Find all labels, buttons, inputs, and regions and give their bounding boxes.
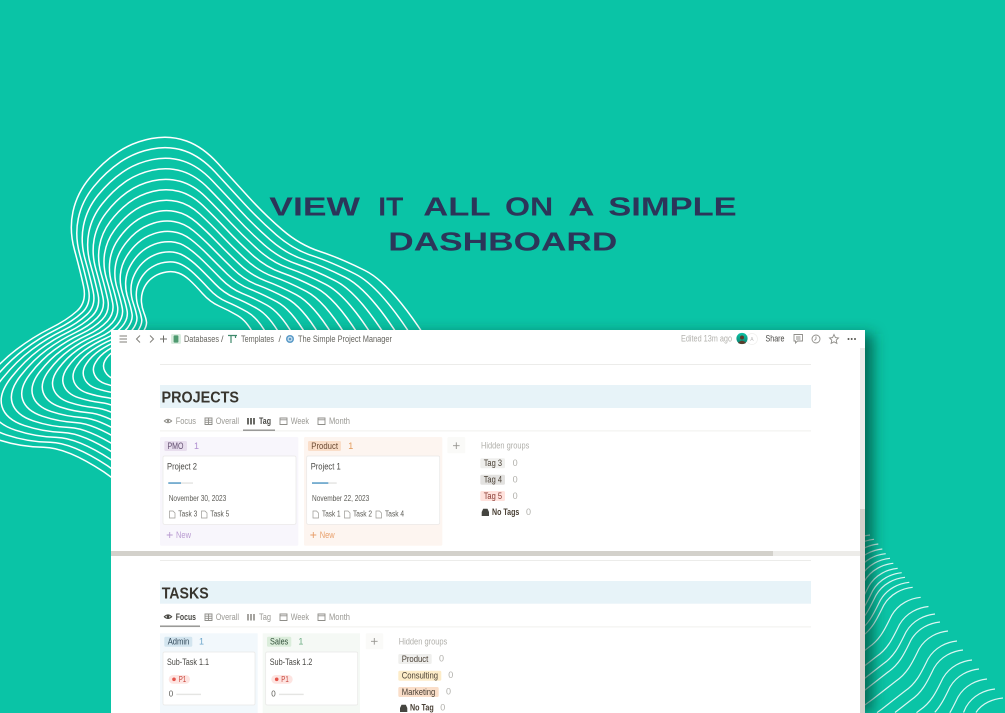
icon: back and forward arrows (136, 336, 154, 342)
card: Sub-Task 1.1: Sub-Task 1.1 (167, 657, 209, 667)
tabs: tasks: Month (329, 612, 350, 622)
hidden groups: tasks: Product (402, 654, 429, 664)
column: Admin: 1 (199, 637, 204, 647)
divider (160, 626, 811, 628)
breadcrumb: page name: The Simple Project Manager (298, 334, 392, 344)
avatar (736, 333, 748, 344)
hidden groups: tasks: 0 (448, 670, 453, 680)
hidden groups: tasks: 0 (446, 686, 451, 696)
card: Project 1: November 22, 2023 (312, 494, 370, 503)
icon: target (286, 335, 294, 343)
hidden groups: tasks: 0 (440, 702, 445, 712)
banner: projects heading (160, 385, 811, 408)
column: Admin (160, 633, 258, 713)
decorative contour waves: left blob (0, 137, 424, 490)
hidden groups: projects (480, 440, 531, 517)
title second line: DASHBOARD (388, 227, 617, 257)
tabs: tasks: Week (291, 612, 309, 622)
icon: templates crane (228, 336, 237, 343)
tabs: tasks: Focus (176, 612, 196, 622)
hidden groups: tasks: Consulting (402, 671, 438, 681)
icon: database (171, 334, 181, 344)
title: ON (505, 192, 553, 222)
card: Sub-Task 1.1: 0 (169, 690, 174, 699)
card: Project 1 (307, 456, 440, 524)
column: Sales: 1 (298, 637, 303, 647)
hidden groups: projects: 0 (513, 491, 518, 501)
hidden groups: projects: 0 (513, 458, 518, 468)
card: Project 1: Task 1 (322, 510, 341, 518)
card: Sub-Task 1.1: P1 (179, 675, 187, 684)
hidden groups: projects: 0 (513, 474, 518, 484)
card: Project 2: Task 3 (178, 510, 198, 518)
tabs: tasks: Tag (259, 612, 271, 622)
share: Share (766, 334, 784, 344)
banner: tasks heading: TASKS (162, 585, 209, 602)
hidden groups: projects: Tag 3 (484, 458, 502, 468)
card: Sub-Task 1.2: P1 (281, 675, 289, 684)
column: PMO: New (176, 530, 191, 540)
edited time: Edited 13m ago (681, 334, 732, 344)
tabs: tasks (160, 612, 350, 627)
column: PMO: PMO (168, 441, 184, 451)
card: Project 2: Project 2 (167, 461, 197, 471)
hidden groups: tasks: Hidden groups (399, 636, 448, 646)
card: Sub-Task 1.2: Sub-Task 1.2 (270, 657, 312, 667)
tabs: projects: Week (291, 416, 309, 426)
title: SIMPLE (608, 192, 737, 222)
hidden groups: projects: Tag 4 (484, 474, 502, 484)
divider (160, 430, 811, 432)
breadcrumb separator: / (221, 334, 224, 344)
icon: clock (812, 335, 820, 343)
panel shadow (130, 334, 873, 713)
tabs: projects: Tag (259, 416, 271, 426)
card: Project 2 (163, 456, 296, 524)
tabs: projects: Month (329, 416, 350, 426)
card: Project 2: November 30, 2023 (169, 494, 227, 503)
divider (160, 560, 811, 561)
card: Project 1: Task 2 (353, 510, 372, 518)
icon: comments (794, 334, 802, 343)
breadcrumb: Databases: Databases (184, 334, 219, 344)
second avatar (746, 334, 758, 344)
hidden groups: tasks: Marketing (402, 687, 435, 697)
hidden groups: projects: 0 (526, 507, 531, 517)
divider (160, 364, 811, 365)
icon: more dots (848, 338, 856, 340)
column: Sales: Sales (270, 637, 289, 647)
icon: menu (120, 336, 127, 342)
tabs: projects: Focus (176, 416, 196, 426)
breadcrumb separator: / (278, 334, 282, 344)
hidden groups: projects: Tag 5 (484, 491, 502, 501)
add group button (366, 633, 383, 649)
hidden groups: tasks: 0 (439, 654, 444, 664)
column: Admin: Admin (168, 637, 189, 647)
title: ALL (423, 192, 491, 222)
column: Product: Product (311, 441, 338, 451)
title: A (568, 192, 595, 222)
banner: tasks heading (160, 581, 811, 604)
column: PMO (160, 437, 298, 546)
tabs: projects (164, 416, 350, 431)
hidden groups: tasks: No Tag (410, 702, 434, 712)
tabs: tasks: Overall (216, 612, 239, 622)
card: Project 2: Task 5 (210, 510, 230, 518)
decorative contour waves: bottom right (735, 530, 1003, 713)
card: Sub-Task 1.1 (163, 652, 255, 705)
column: Product (304, 437, 442, 546)
vertical scrollbar (860, 348, 865, 713)
title: IT (378, 192, 403, 222)
banner: projects heading: PROJECTS (162, 389, 239, 406)
horizontal scrollbar (111, 551, 860, 556)
card: Project 1: Project 1 (311, 461, 341, 471)
column: Product: New (320, 530, 335, 540)
column: PMO: 1 (194, 441, 199, 451)
icon: star (830, 334, 838, 343)
icon: plus (160, 336, 167, 342)
hidden groups: projects: Hidden groups (481, 440, 530, 450)
tabs: projects: Overall (216, 416, 239, 426)
breadcrumb: Templates: Templates (241, 334, 274, 344)
hidden groups: tasks (398, 636, 453, 712)
column: Product: 1 (348, 441, 353, 451)
panel: dashboard screenshot (111, 330, 865, 713)
title: VIEW (269, 192, 361, 222)
top bar: breadcrumb (120, 333, 856, 344)
hidden groups: projects: No Tags (492, 507, 519, 517)
second avatar: A (750, 337, 754, 343)
card: Sub-Task 1.2: 0 (271, 690, 276, 699)
column: Sales (263, 633, 360, 713)
add group button (447, 437, 465, 453)
card: Project 1: Task 4 (385, 510, 404, 518)
card: Sub-Task 1.2 (266, 652, 358, 705)
